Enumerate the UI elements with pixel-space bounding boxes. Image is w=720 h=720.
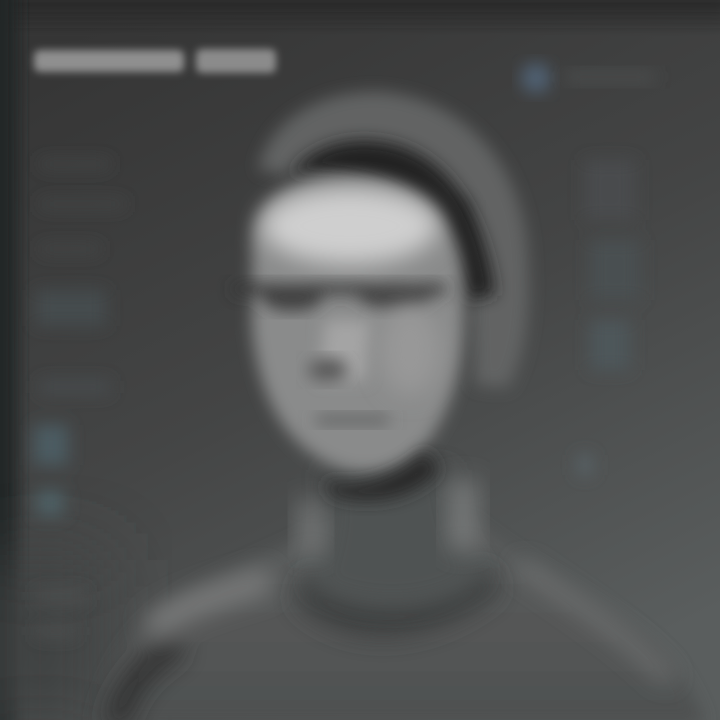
neck left highlight <box>298 500 324 555</box>
nose <box>320 320 370 380</box>
neck right highlight <box>448 480 478 550</box>
neck <box>310 470 485 606</box>
forehead <box>262 188 438 264</box>
left column: blurred data text <box>34 160 125 637</box>
hair dark band <box>290 140 495 300</box>
shoulders and torso <box>95 520 705 720</box>
mouth <box>315 414 390 426</box>
chin shadow <box>325 450 440 501</box>
hair outer halo <box>258 92 529 388</box>
cheek <box>380 305 440 395</box>
glasses <box>232 283 447 311</box>
face <box>252 178 464 472</box>
right column: blurred data text <box>578 160 640 475</box>
heading: blurred title <box>34 49 276 73</box>
icon: blue dot with label <box>521 63 655 93</box>
shoulder highlights <box>115 565 670 720</box>
figure: portrait <box>95 92 705 720</box>
collar shadow <box>295 565 500 636</box>
